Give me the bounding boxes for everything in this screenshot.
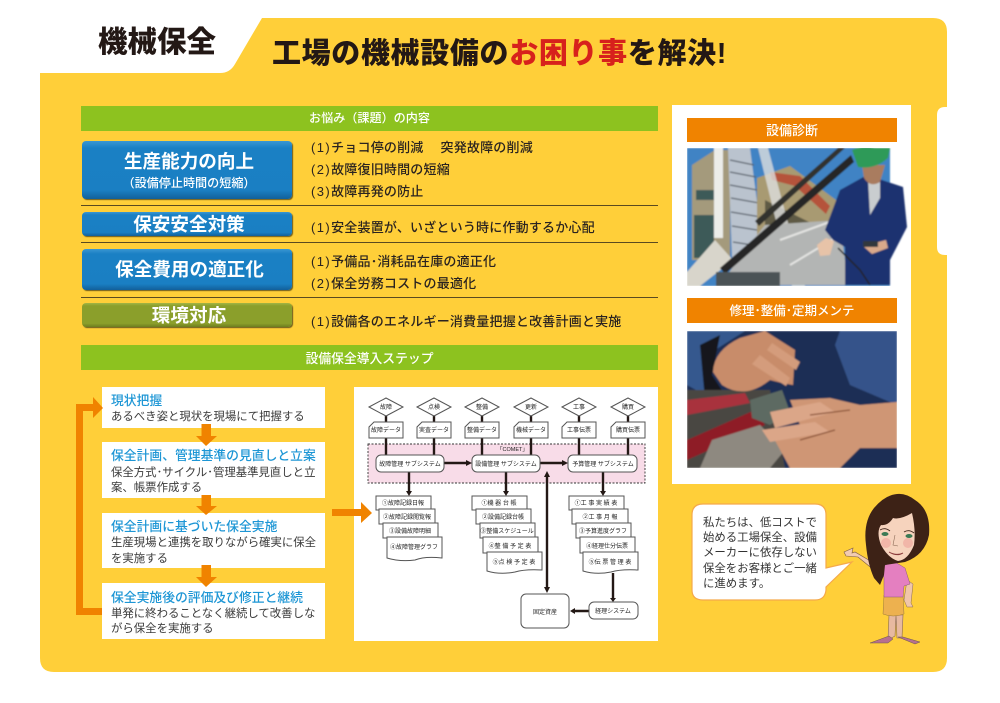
- bubble text: 保全をお客様とご一緒: [703, 563, 817, 575]
- step 1: 現状把握: [111, 393, 162, 408]
- flow diagram: 故障: [380, 403, 392, 411]
- heading: steps: 設備保全導入ステップ: [306, 351, 433, 366]
- button title: 生産能力の向上: [124, 151, 254, 172]
- button: cost: 保全費用の適正化: [115, 259, 264, 280]
- button: environment: 環境対応: [152, 305, 226, 326]
- bubble shape: [691, 503, 854, 601]
- text: (1)チョコ停の削減 突発故障の削減: [311, 140, 533, 155]
- issue list 4: (1)設備各のエネルギー消費量把握と改善計画と実施: [311, 314, 622, 329]
- flow diagram: 更新: [525, 403, 537, 411]
- panel: photos: [672, 105, 911, 484]
- step 4: 単発に終わることなく継続して改善しな: [111, 608, 315, 620]
- step 1: [102, 387, 325, 428]
- heading: issues: [81, 106, 658, 131]
- flow diagram: 経理システム: [595, 607, 631, 615]
- bubble text: に進めます。: [703, 578, 770, 590]
- text: (2)保全労務コストの最適化: [311, 276, 476, 291]
- heading: maintenance: 修理･整備･定期メンテ: [729, 304, 854, 318]
- step 2: 案、帳票作成する: [111, 482, 202, 494]
- flow diagram: ③予算進度グラフ: [579, 527, 627, 535]
- flow diagram: ④整 備 予 定 表: [489, 542, 531, 550]
- flow diagram: ③設備故障明細: [389, 527, 431, 535]
- button subtitle: （設備停止時間の短縮）: [122, 176, 256, 190]
- flow diagram: ④故障管理グラフ: [390, 543, 438, 551]
- flow diagram: 整備: [476, 403, 488, 411]
- step 4: がら保全を実施する: [111, 623, 214, 635]
- button: safety: [82, 212, 292, 236]
- button: cost: [82, 249, 292, 290]
- flow diagram: ②工 事 月 報: [582, 513, 618, 521]
- step 4: 保全実施後の評価及び修正と継続: [111, 590, 303, 605]
- issue list 2: (1)安全装置が、いざという時に作動するか心配: [311, 220, 595, 235]
- step 3: [102, 513, 325, 568]
- bubble text: メーカーに依存しない: [703, 547, 817, 559]
- heading: steps: [81, 345, 658, 370]
- step 2: 保全方式･サイクル･管理基準見直しと立: [111, 467, 315, 479]
- flow diagram: 故障データ: [371, 426, 401, 434]
- button: environment: [82, 303, 292, 327]
- flow diagram: [354, 387, 658, 641]
- main title: 工場の機械設備のお困り事を解決!: [272, 38, 727, 70]
- flow diagram: 故障管理 サブシステム: [379, 460, 441, 468]
- flow diagram: ⑤伝 票 管 理 表: [589, 558, 631, 566]
- flow diagram: ①工 事 実 績 表: [575, 499, 617, 507]
- flow diagram: 設備管理 サブシステム: [475, 460, 537, 468]
- flow diagram: ③整備スケジュール: [480, 527, 534, 535]
- photo: plant inspection: [687, 148, 908, 286]
- flow diagram: ④経理仕分伝票: [586, 542, 628, 550]
- flow diagram: 「COMET」: [497, 446, 528, 453]
- flow diagram: 点検: [428, 403, 440, 411]
- flow diagram: ②設備記録台帳: [482, 513, 524, 521]
- flow diagram: 固定資産: [533, 608, 557, 616]
- issue list 1: [311, 140, 533, 199]
- bubble text: 始める工場保全、設備: [703, 532, 817, 544]
- flow diagram: 予算管理 サブシステム: [572, 460, 634, 468]
- button: production capacity: [82, 141, 292, 199]
- step 2: [102, 442, 325, 498]
- step 1: あるべき姿と現状を現場にて把握する: [111, 411, 305, 423]
- tab heading: 機械保全: [98, 26, 216, 59]
- step 2: 保全計画、管理基準の見直しと立案: [111, 448, 316, 463]
- step 3: を実施する: [111, 553, 168, 565]
- bubble text: [703, 516, 817, 590]
- flow diagram: 整備データ: [467, 426, 497, 434]
- flow diagram: 工事伝票: [567, 426, 591, 434]
- flow diagram: ②故障記録閲覧報: [383, 513, 431, 521]
- text: (1)予備品･消耗品在庫の適正化: [311, 254, 496, 269]
- flow diagram: ①故障記録日報: [382, 499, 424, 507]
- flow diagram: 機械データ: [516, 426, 546, 434]
- heading: diagnosis: 設備診断: [766, 123, 818, 138]
- bubble text: 私たちは、低コストで: [703, 517, 817, 529]
- issue list 3: [311, 254, 496, 291]
- photo: hands repairing: [687, 331, 897, 468]
- flow diagram: ①機 器 台 帳: [481, 499, 517, 507]
- text: (2)故障復旧時間の短縮: [311, 162, 450, 177]
- step 4: [102, 583, 325, 639]
- heading: issues: お悩み（課題）の内容: [309, 111, 430, 125]
- speech bubble: [691, 503, 854, 601]
- button: safety: 保安安全対策: [133, 214, 245, 235]
- text: (3)故障再発の防止: [311, 184, 424, 199]
- flow diagram: ⑤点 検 予 定 表: [493, 558, 535, 566]
- heading: maintenance: [687, 298, 897, 323]
- character: woman presenter: [844, 494, 930, 644]
- flow diagram: 購買: [622, 403, 634, 411]
- flow diagram: 購買伝票: [616, 426, 640, 434]
- step 3: 生産現場と連携を取りながら確実に保全: [111, 537, 316, 549]
- step 3: 保全計画に基づいた保全実施: [111, 519, 277, 534]
- flow diagram: 実査データ: [419, 426, 449, 434]
- flow diagram: 工事: [573, 403, 585, 411]
- heading: diagnosis: [687, 118, 897, 142]
